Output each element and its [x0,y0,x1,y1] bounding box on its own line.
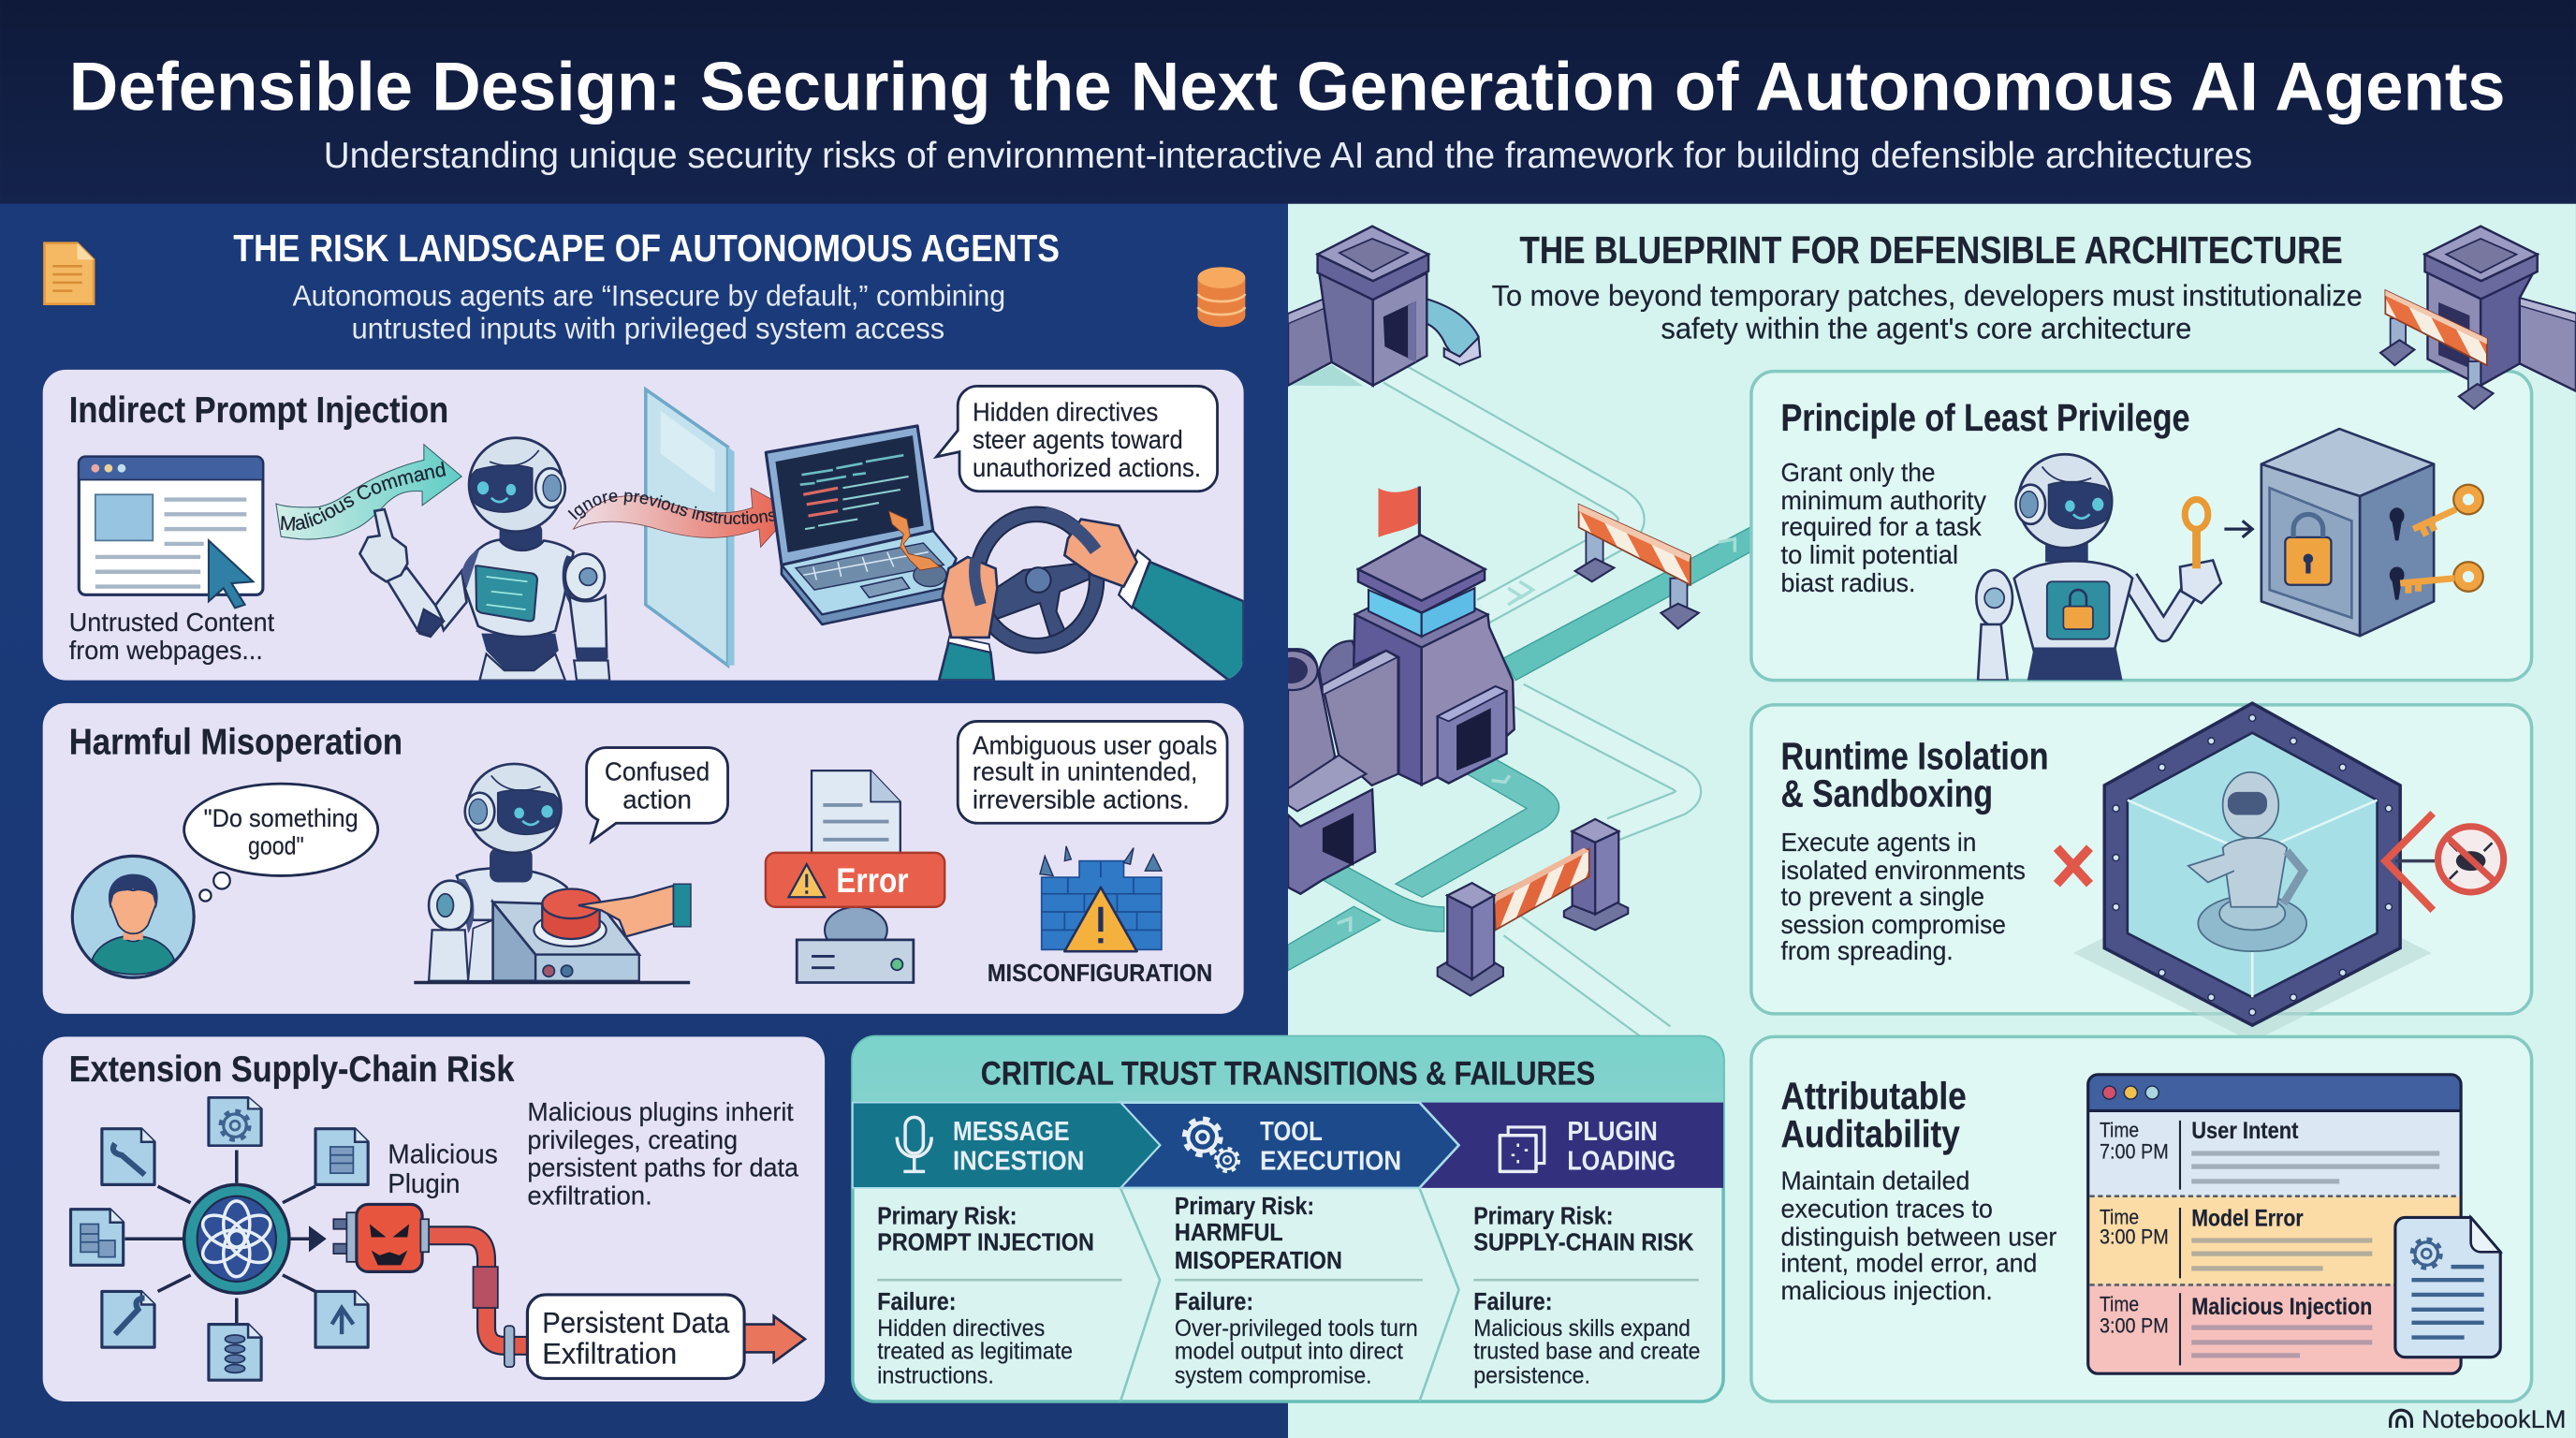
panel: extension supply-chain risk [43,1036,825,1401]
panel heading: risk landscape [233,227,1060,345]
body text [1781,828,2026,965]
callout: ambiguous user goals: Ambiguous user goals [973,731,1218,760]
red pipe [419,1236,529,1367]
icon: key and arrow [2185,500,2252,568]
step header: tool execution: EXECUTION [1260,1147,1401,1177]
text: malicious plugins inherit: privileges, creating [527,1125,738,1154]
thought bubble: do something good: "Do something [204,803,359,832]
log row: malicious injection: Time [2100,1293,2139,1316]
panel heading: risk landscape: Autonomous agents are “Insecure by default,” combining [292,278,1005,312]
icon: database [1197,267,1245,327]
illustration: central fortress [1268,486,1515,894]
robot: holding key [1976,454,2221,681]
heading [1781,734,2049,815]
column: prompt injection: Failure: [877,1287,956,1315]
body text: Maintain detailed [1781,1167,1969,1196]
background: left panel [0,204,1288,1438]
column: supply-chain risk: Malicious skills expand [1473,1316,1690,1342]
icon: browser window [79,457,263,608]
log row: model error: 3:00 PM [2100,1225,2169,1249]
hub and plugin network [71,1097,368,1380]
log window [2088,1075,2461,1373]
icon: malicious plugin devil [333,1204,429,1271]
log row: model error [2100,1205,2372,1269]
heading: Runtime Isolation [1781,734,2049,777]
arrow: malicious command ribbon: Malicious Command [281,462,446,531]
caption: untrusted content: Untrusted Content [69,608,274,637]
body text: intent, model error, and [1781,1248,2037,1277]
panel: critical trust transitions and failures [853,1036,1723,1401]
icon: sandbox hexagon with robot [2073,703,2431,1042]
log row: user intent [2100,1118,2439,1181]
step header: message ingestion: MESSAGE [953,1117,1070,1147]
body text: to prevent a single [1781,882,1984,911]
body text: from spreading. [1781,936,1954,965]
column: harmful misoperation: HARMFUL [1175,1218,1283,1246]
robot: agent pointing [359,438,609,681]
callout: hidden directives: steer agents toward [973,425,1183,454]
body text: Execute agents in [1781,828,1976,857]
illustration: top-left tower [1288,227,1480,386]
column: supply-chain risk: persistence. [1473,1364,1590,1389]
icon: laptop with code [766,426,956,624]
callout: ambiguous user goals: irreversible actions. [973,785,1190,814]
icon: blocked bug [2385,814,2504,910]
title: Defensible Design: Securing the Next Generation of Autonomous AI Agents [69,48,2505,125]
icon: error document and drive [766,770,944,983]
column: supply-chain risk: SUPPLY-CHAIN RISK [1473,1228,1693,1256]
column: supply-chain risk [1473,1201,1701,1389]
column: prompt injection: Hidden directives [877,1316,1045,1342]
left hand [943,557,997,638]
logo: NotebookLM: NotebookLM [2422,1404,2566,1433]
text: malicious plugins inherit: Malicious plugins inherit [527,1097,794,1126]
icon: steering wheel with hands [939,513,1244,681]
box: persistent data exfiltration: Exfiltration [542,1337,677,1371]
log row: malicious injection [2100,1293,2372,1356]
header band [0,0,2576,204]
thought bubble: do something good: good" [248,831,304,860]
body text: isolated environments [1781,856,2026,885]
icon: error document and drive: Error [836,861,909,900]
text: malicious plugins inherit [527,1097,798,1210]
callout: confused action: Confused [605,757,710,786]
heading: & Sandboxing [1781,772,1993,815]
arrow: ignore previous instructions ribbon: Ignore previous instructions [567,492,774,524]
robot arm and hand [359,509,466,637]
icon: document [44,243,94,304]
column: harmful misoperation: system compromise. [1175,1364,1372,1389]
blueprint background: isometric paths [1288,372,1756,1036]
heading: Principle of Least Privilege [1781,396,2190,439]
box: persistent data exfiltration: Persistent Data [542,1305,730,1339]
box: persistent data exfiltration [527,1295,805,1378]
right hand [1064,520,1137,587]
log row: model error: Time [2100,1205,2139,1228]
icon: audit document [2395,1217,2500,1357]
column dividers [1120,1188,1459,1401]
heading [1781,1075,1967,1155]
column: prompt injection: PROMPT INJECTION [877,1228,1094,1256]
column: supply-chain risk: Primary Risk: [1473,1201,1613,1229]
log row: user intent: Time [2100,1118,2139,1141]
column: harmful misoperation [1175,1192,1423,1389]
step header: plugin loading: PLUGIN [1567,1117,1658,1147]
panel heading: blueprint [1492,228,2363,345]
heading: CRITICAL TRUST TRANSITIONS & FAILURES [981,1055,1595,1092]
log row: model error: Model Error [2191,1206,2304,1231]
icon: safe with keys [2261,429,2483,636]
column: supply-chain risk: Failure: [1473,1287,1553,1315]
label: malicious plugin: Plugin [388,1169,460,1199]
log row: user intent: 7:00 PM [2100,1139,2169,1163]
callout: confused action: action [622,785,692,814]
arrow: ignore previous instructions ribbon [567,487,775,549]
column: prompt injection: Primary Risk: [877,1201,1017,1229]
panel: runtime isolation and sandboxing [1751,703,2532,1042]
body text: to limit potential [1781,540,1958,569]
heading: Attributable [1781,1075,1967,1118]
callout: ambiguous user goals: result in unintended, [973,757,1197,786]
panel: attributable auditability [1751,1036,2532,1401]
column: prompt injection: treated as legitimate [877,1339,1073,1364]
icon: machine with red button [414,884,691,983]
background: right panel [1288,204,2576,1438]
heading: Harmful Misoperation [69,723,402,763]
panel heading: blueprint: safety within the agent's core architecture [1661,312,2191,345]
icon: brick wall with warning [1040,846,1162,951]
icon: user avatar [72,856,194,977]
caption: untrusted content: from webpages... [69,636,263,665]
body text: session compromise [1781,910,2006,939]
body text: biast radius. [1781,568,1915,597]
step header: tool execution [1120,1103,1459,1188]
text: malicious plugins inherit: persistent paths for data [527,1153,798,1182]
text: malicious plugins inherit: exfiltration. [527,1181,652,1210]
panel heading: risk landscape: untrusted inputs with privileged system access [352,312,944,345]
label: misconfiguration: MISCONFIGURATION [988,959,1212,987]
body text: required for a task [1781,512,1983,541]
column: supply-chain risk: trusted base and create [1473,1339,1701,1364]
callout: confused action [587,748,728,842]
step header: plugin loading [1419,1103,1723,1188]
step header: plugin loading: LOADING [1567,1147,1676,1177]
label: malicious plugin [388,1140,498,1199]
caption: untrusted content [69,608,274,665]
panel heading: blueprint: THE BLUEPRINT FOR DEFENSIBLE ARCHITECTURE [1519,228,2343,271]
illustration: top-right tower and barrier [2380,227,2576,409]
panel: harmful misoperation [43,703,1244,1014]
panel: principle of least privilege [1751,372,2532,681]
body text: distinguish between user [1781,1222,2056,1251]
thought bubble: do something good [184,784,378,902]
callout: ambiguous user goals [958,721,1227,823]
heading: Auditability [1781,1112,1960,1155]
heading: Indirect Prompt Injection [69,390,448,431]
illustration: barrier 1 [1575,505,1699,628]
body text: malicious injection. [1781,1276,1993,1305]
body text: Grant only the [1781,458,1935,487]
icon: red x [2056,848,2089,884]
panel heading: blueprint: To move beyond temporary patches, developers must institutionalize [1492,278,2363,312]
panel heading: risk landscape: THE RISK LANDSCAPE OF AUTONOMOUS AGENTS [233,227,1060,270]
log row: user intent: User Intent [2191,1119,2298,1144]
callout: hidden directives [936,386,1218,492]
body text: minimum authority [1781,486,1986,515]
callout: hidden directives: unauthorized actions. [973,453,1201,482]
step header: message ingestion [853,1103,1160,1188]
step header: tool execution: TOOL [1260,1117,1323,1147]
panel: indirect prompt injection [43,369,1244,681]
column: harmful misoperation: Failure: [1175,1287,1253,1315]
torso [481,634,559,670]
column: harmful misoperation: Primary Risk: [1175,1192,1314,1220]
heading: Extension Supply-Chain Risk [69,1049,515,1090]
body text [1781,1167,2056,1305]
glass barrier [646,389,735,666]
log row: malicious injection: 3:00 PM [2100,1313,2169,1337]
callout: hidden directives: Hidden directives [973,397,1158,426]
subtitle: Understanding unique security risks of environment-interactive AI and the framework for building defensible architectures [324,136,2252,176]
robot: confused agent at button [414,764,691,983]
column: harmful misoperation: Over-privileged tools turn [1175,1316,1418,1342]
step header: message ingestion: INCESTION [953,1147,1084,1177]
illustration: barrier 2 [1438,819,1628,996]
robot head [469,438,565,532]
label: malicious plugin: Malicious [388,1140,498,1170]
body text: execution traces to [1781,1194,1993,1223]
column: prompt injection [877,1201,1122,1389]
log row: malicious injection: Malicious Injection [2191,1295,2372,1320]
column: prompt injection: instructions. [877,1364,994,1389]
column: harmful misoperation: model output into direct [1175,1339,1403,1364]
column: harmful misoperation: MISOPERATION [1175,1246,1342,1274]
body text [1781,458,1986,597]
